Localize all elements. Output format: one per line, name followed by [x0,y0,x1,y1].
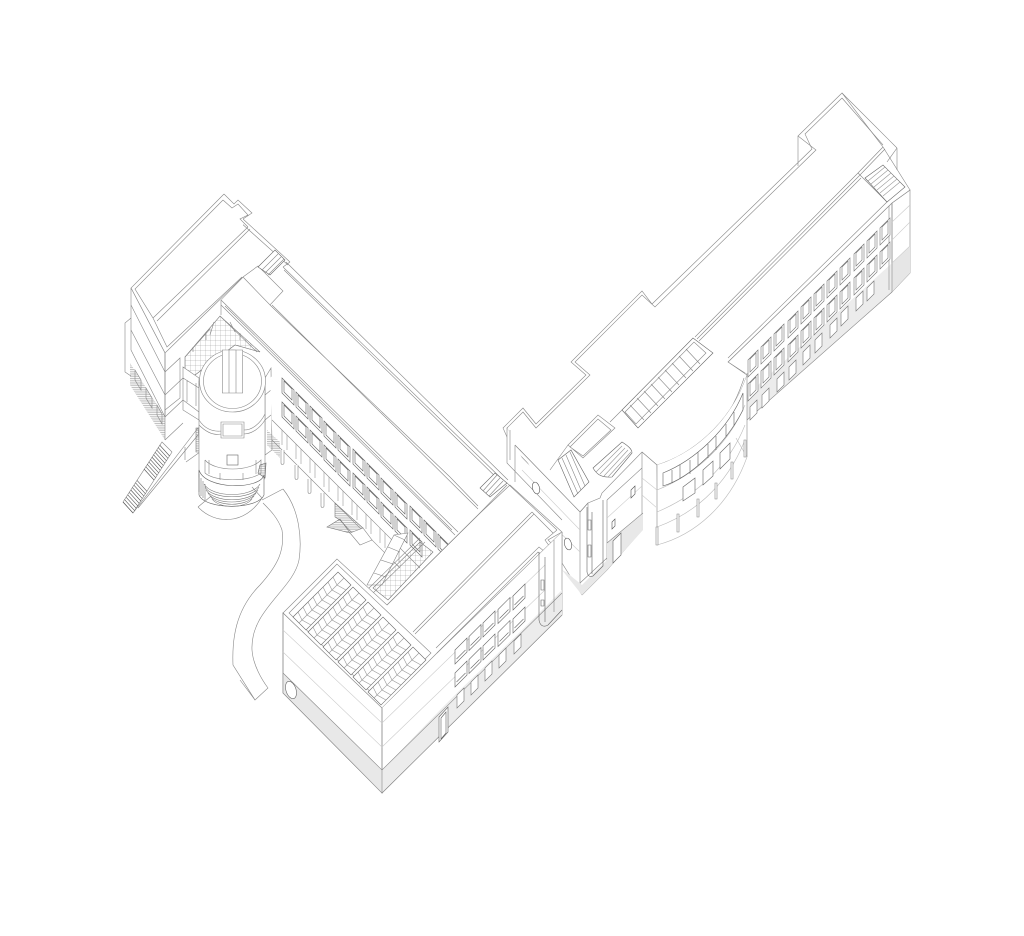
south block pilaster [539,552,562,626]
main roof outline [507,93,910,512]
curved stair [593,442,632,477]
pilaster with rounded base [587,500,603,577]
left wing [123,194,562,793]
cylindrical tower [199,350,266,506]
south courtyard ramp [367,533,408,585]
curved wall with columns [655,373,747,545]
roof lines near entrance [550,410,622,470]
courtyard grid south [373,542,433,600]
entrance block walls [507,428,657,595]
tower top circle [200,350,266,412]
stair on long roof [258,250,285,275]
skylight parapet [289,564,431,703]
roof parapet lines [503,93,897,517]
long block roof [221,219,508,605]
west block roof [131,194,252,353]
link block beside tower [165,367,272,455]
roof skylight bands [293,572,426,705]
long wall with window rows [728,190,910,420]
south block windows [439,584,525,742]
courtyard steps [327,503,372,545]
south block roof [283,485,562,708]
curved driveway [233,489,300,700]
tower base shadow strip [258,463,266,478]
stair on south block [480,473,507,497]
courtyard facade windows [267,368,452,590]
circular end window [283,680,299,700]
sloped glazing [558,450,589,497]
courtyard grid roof [185,316,260,375]
west block wall [125,288,183,440]
roof skylight [622,338,713,428]
stair to the west [123,428,200,513]
south block [283,473,562,793]
right wing [503,93,910,595]
plaza arc [198,487,262,520]
stair at roof end [865,165,905,202]
box skylight [568,415,615,458]
south block walls [283,532,562,793]
